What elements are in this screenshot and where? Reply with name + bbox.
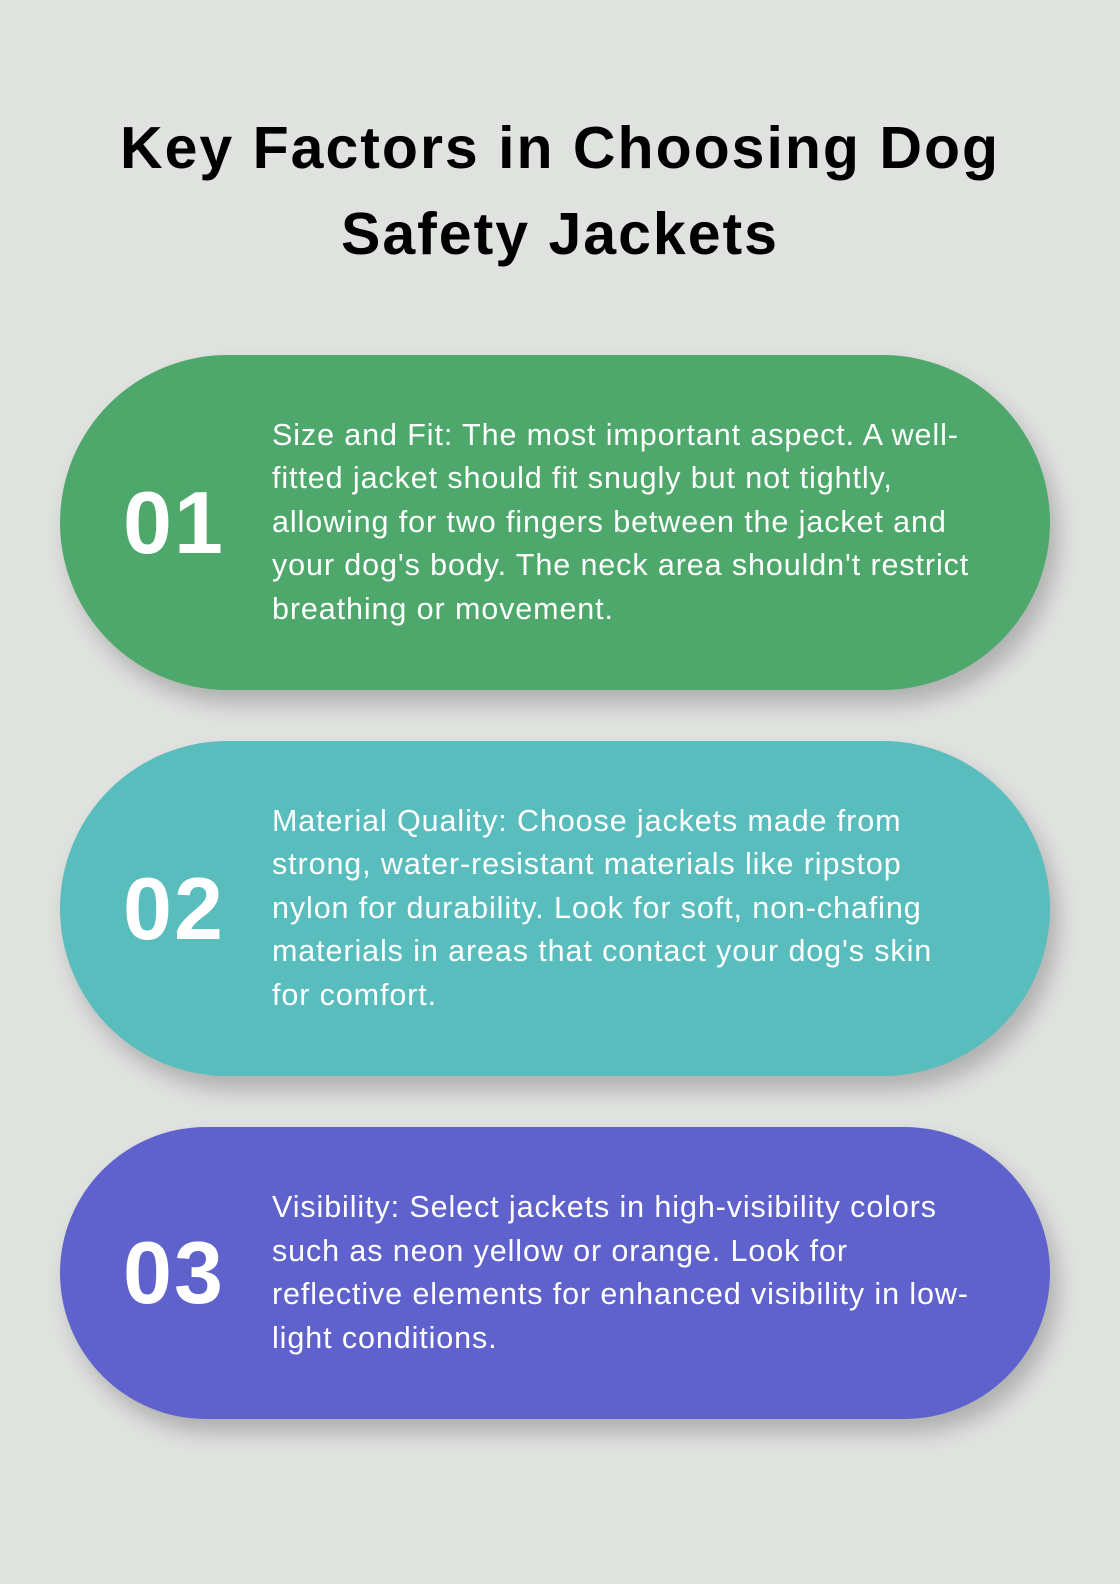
text: visibility: Visibility: Select jackets in high-visibility colors: [272, 1190, 937, 1224]
text: visibility: light conditions.: [272, 1320, 498, 1354]
number 02: 02: [123, 858, 225, 958]
text: size and fit: [272, 418, 969, 626]
title: [120, 115, 1000, 267]
text: material quality: for comfort.: [272, 978, 437, 1012]
text: size and fit: your dog's body. The neck area shouldn't restrict: [272, 548, 969, 582]
panel: size and fit: [60, 355, 1050, 690]
title: Key Factors in Choosing Dog: [120, 115, 1000, 181]
text: visibility: such as neon yellow or orange. Look for: [272, 1234, 848, 1268]
text: visibility: reflective elements for enhanced visibility in low-: [272, 1277, 969, 1311]
panel: visibility: [60, 1127, 1050, 1419]
text: material quality: Material Quality: Choose jackets made from: [272, 804, 901, 838]
text: size and fit: Size and Fit: The most important aspect. A well-: [272, 418, 959, 452]
text: material quality: nylon for durability. Look for soft, non-chafing: [272, 891, 922, 925]
text: size and fit: fitted jacket should fit snugly but not tightly,: [272, 461, 893, 495]
text: material quality: materials in areas that contact your dog's skin: [272, 934, 932, 968]
text: material quality: strong, water-resistant materials like ripstop: [272, 847, 902, 881]
number 03: 03: [123, 1223, 225, 1322]
text: visibility: [272, 1190, 969, 1354]
text: size and fit: breathing or movement.: [272, 592, 614, 626]
text: material quality: [272, 804, 932, 1012]
text: size and fit: allowing for two fingers between the jacket and: [272, 505, 947, 539]
panel: material quality: [60, 741, 1050, 1076]
title: Safety Jackets: [341, 201, 779, 267]
number 01: 01: [123, 472, 225, 572]
